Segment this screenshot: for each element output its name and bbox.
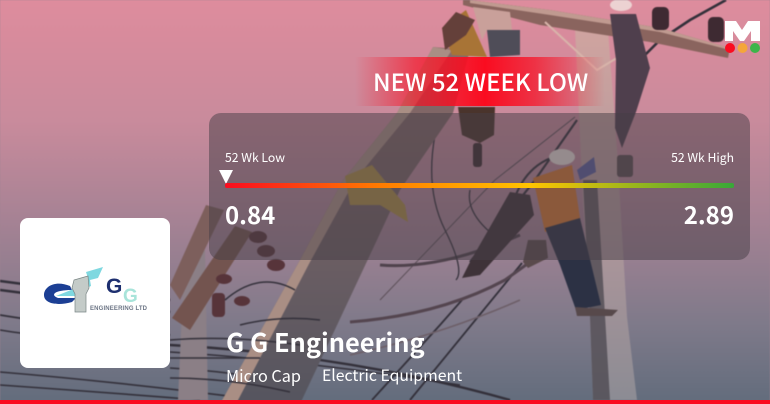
panel: 52 week range (209, 113, 750, 260)
label: 52 wk low: 52 Wk Low (225, 148, 285, 166)
letter mark M (725, 21, 760, 41)
banner: new 52 week low: NEW 52 WEEK LOW (373, 63, 588, 98)
marker: current price triangle (219, 170, 233, 184)
upper worker (610, 14, 650, 148)
company logo: G (123, 286, 138, 307)
range bar gradient (225, 183, 734, 188)
value: high: 2.89 (684, 196, 734, 231)
company logo: G (106, 275, 122, 298)
company name: G G Engineering (226, 324, 425, 360)
tag: sector: Electric Equipment (322, 363, 462, 386)
lower worker (533, 165, 580, 232)
value: low: 0.84 (225, 196, 275, 231)
left poles (178, 250, 208, 400)
diagonal pole (220, 47, 470, 404)
company logo: ENGINEERING LTD (90, 306, 148, 312)
logo card (20, 218, 170, 368)
right concrete pole (575, 28, 637, 400)
traffic light dots (725, 43, 760, 53)
label: 52 wk high: 52 Wk High (671, 148, 734, 166)
wire junction insulator chain (462, 192, 534, 278)
company logo (44, 267, 148, 312)
tag: market cap: Micro Cap (226, 363, 301, 387)
insulators (652, 7, 724, 42)
hanging device (458, 107, 495, 143)
top worker on diagonal pole (473, 7, 512, 40)
brand logo (725, 21, 760, 53)
cross arm (463, 0, 730, 58)
banner: new 52 week low (355, 57, 605, 106)
left insulators (212, 231, 285, 317)
bottom red rule (0, 400, 770, 404)
